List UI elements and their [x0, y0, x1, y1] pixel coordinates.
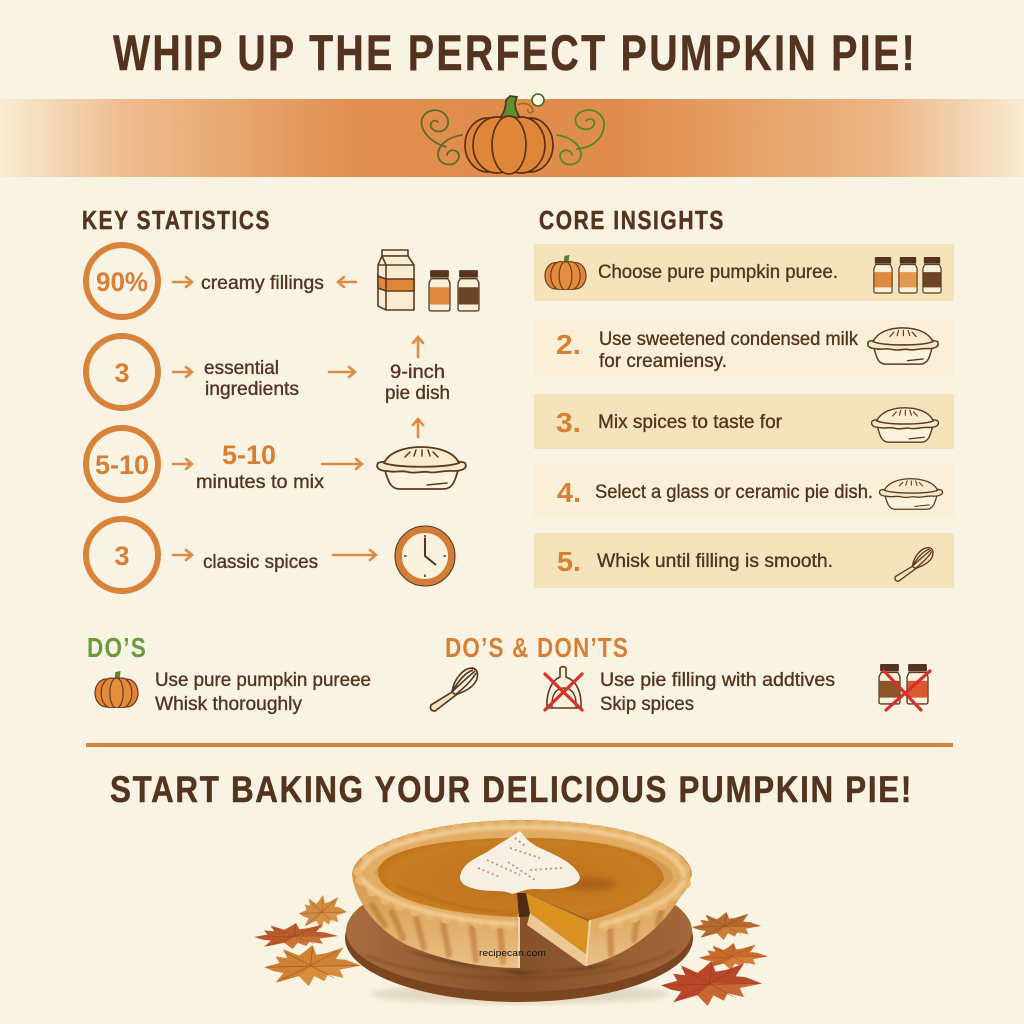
stat: 3 essential ingredients: ingredients [205, 379, 299, 400]
divider [86, 743, 953, 747]
insight 5: Whisk until filling is smooth. [597, 551, 833, 572]
panel: key statistics [82, 205, 479, 591]
autumn leaves [254, 895, 768, 1006]
don'ts list: Use pie filling with addtives [600, 670, 835, 691]
insight 2: 2. [556, 329, 581, 360]
icon: crossed-out spice jars [879, 664, 930, 710]
insight 4 [534, 463, 954, 518]
label: 9-inch pie dish [385, 362, 450, 404]
stat: 3 classic spices: classic spices [203, 552, 318, 573]
insight 2: Use sweetened condensed milk [599, 329, 858, 350]
stat: 90% creamy fillings [86, 245, 356, 317]
icon: pumpkin [95, 671, 138, 708]
crust rim [358, 824, 688, 930]
panel: do's and don'ts [445, 632, 930, 715]
stat: 3 classic spices: 3 [114, 541, 130, 571]
stat: 3 essential ingredients: 3 [114, 358, 130, 388]
insight 2: for creamiensy. [599, 351, 727, 372]
insight 5: 5. [557, 546, 581, 577]
do's list: Whisk thoroughly [155, 694, 302, 715]
board shadow and board [370, 984, 670, 1004]
don'ts list: Skip spices [600, 694, 694, 715]
stat: 90% creamy fillings: 90% [96, 267, 148, 297]
stat: 5-10 minutes to mix: 5-10 [222, 440, 276, 470]
pie crust wall [352, 820, 692, 968]
icon: clock [395, 526, 455, 586]
do's list [155, 670, 371, 715]
stat: 5-10 minutes to mix: minutes to mix [196, 472, 325, 493]
label: 9-inch pie dish: pie dish [385, 383, 450, 404]
watermark: recipecan.com [479, 948, 546, 959]
insight 3 [534, 394, 954, 449]
heading: core insights: CORE INSIGHTS [539, 205, 725, 235]
icon: milk carton [378, 250, 414, 310]
insight 1: Choose pure pumpkin puree. [598, 262, 838, 283]
stat: 3 essential ingredients: essential [204, 358, 279, 379]
stat: 3 classic spices [86, 519, 376, 591]
insight 2 [534, 319, 954, 377]
heading: do's and don'ts: DO’S & DON’TS [445, 632, 629, 663]
icon: pumpkin [465, 94, 553, 174]
icon: pie [377, 447, 466, 489]
icon: whisk [430, 668, 478, 711]
label: 9-inch pie dish: 9-inch [390, 362, 445, 383]
arrow: up to pie dish label [413, 419, 423, 437]
pie shadow on board [405, 950, 620, 975]
filling [378, 838, 664, 920]
insight 4: Select a glass or ceramic pie dish. [595, 482, 873, 503]
insight 3: Mix spices to taste for [598, 412, 783, 433]
stat: 5-10 minutes to mix [86, 428, 362, 500]
stat: 3 essential ingredients [86, 336, 355, 408]
header band with pumpkin [0, 94, 1024, 177]
panel: do's [87, 632, 478, 715]
insight 4: 4. [557, 477, 581, 508]
panel: core insights [534, 205, 954, 588]
heading: do's: DO’S [87, 632, 147, 663]
cut slice face [526, 893, 590, 955]
heading: key statistics: KEY STATISTICS [82, 205, 271, 235]
icon: spice jars [429, 270, 479, 311]
stat: 90% creamy fillings: creamy fillings [201, 273, 324, 294]
icon: crossed-out can [545, 666, 582, 710]
don'ts list [600, 670, 835, 715]
insight 5 [534, 533, 954, 588]
whipped cream [460, 831, 580, 894]
icon: decorative green swirls [421, 110, 604, 165]
crust flutes [372, 898, 664, 962]
illustration: pumpkin pie on wooden board [254, 820, 768, 1006]
stat: 5-10 minutes to mix: 5-10 [95, 450, 149, 480]
arrow: up to spice jars [413, 337, 423, 357]
insight 3: 3. [556, 407, 581, 438]
do's list: Use pure pumpkin pureee [155, 670, 371, 691]
insight 1 [534, 244, 954, 301]
